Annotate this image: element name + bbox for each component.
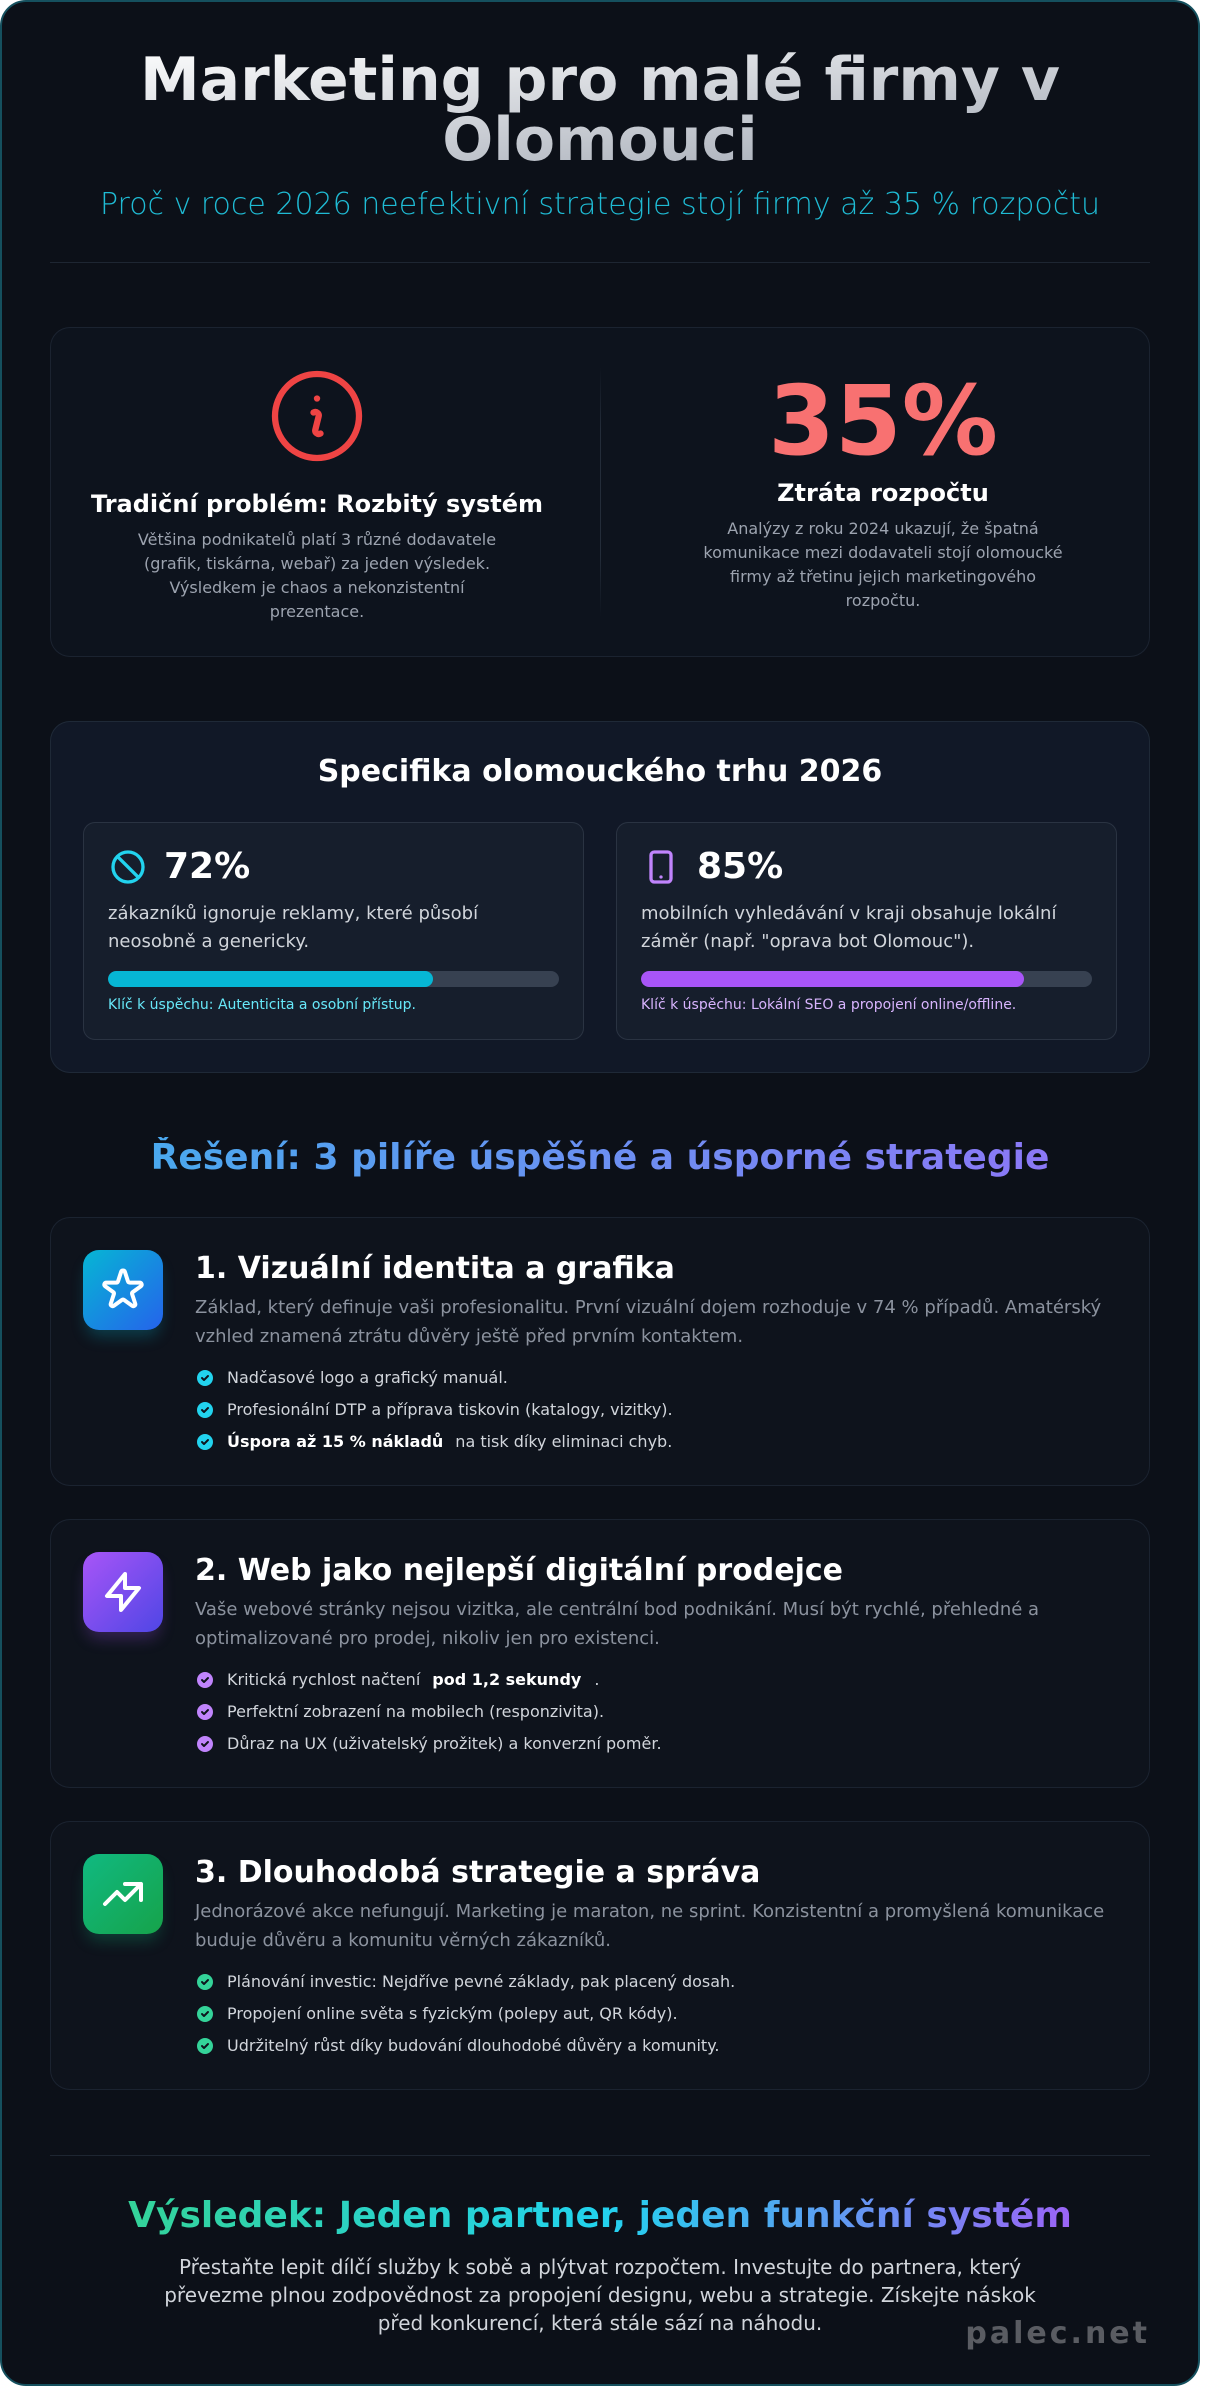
progress bar: 85 percent	[641, 971, 1092, 987]
list item: Profesionální DTP a příprava tiskovin (katalogy, vizitky).	[227, 1400, 673, 1419]
watermark: palec.net: palec.net	[965, 2316, 1150, 2351]
text: conclusion: převezme plnou zodpovědnost za propojení designu, webu a strategie. Získejte náskok	[164, 2283, 1036, 2307]
text: traditional problem: prezentace.	[270, 602, 364, 621]
text: conclusion: před konkurencí, která stále sází na náhodu.	[378, 2311, 822, 2335]
text: pillar 3	[194, 1901, 1104, 1951]
text: traditional problem: Výsledkem je chaos a nekonzistentní	[169, 578, 465, 597]
text: pillar 1: vzhled znamená ztrátu důvěry ještě před prvním kontaktem.	[195, 1326, 743, 1347]
text: pillar 2: optimalizované pro prodej, nikoliv jen pro existenci.	[195, 1628, 660, 1649]
text: pillar 3: Jednorázové akce nefungují. Marketing je maraton, ne sprint. Konzistentní a promyšlená komunikace	[195, 1901, 1104, 1922]
title	[50, 50, 1150, 170]
text: ads ignored: neosobně a genericky.	[108, 931, 309, 952]
heading: market specifics: Specifika olomouckého trhu 2026	[318, 754, 882, 789]
icon: bolt	[83, 1552, 163, 1632]
list item: Důraz na UX (uživatelský prožitek) a konverzní poměr.	[227, 1734, 662, 1753]
list item: Úspora až 15 % nákladů na tisk díky eliminaci chyb.	[227, 1432, 672, 1451]
text: conclusion: Přestaňte lepit dílčí služby k sobě a plýtvat rozpočtem. Investujte do partnera, který	[179, 2255, 1021, 2279]
heading: result: Výsledek: Jeden partner, jeden funkční systém	[128, 2195, 1072, 2236]
note: key to success: Klíč k úspěchu: Autenticita a osobní přístup.	[108, 997, 416, 1013]
progress bar: 72 percent	[108, 971, 559, 987]
heading: pillar 2: 2. Web jako nejlepší digitální prodejce	[195, 1553, 843, 1588]
text: pillar 1: Základ, který definuje vaši profesionalitu. První vizuální dojem rozhoduje v 74 % případů. Amatérský	[195, 1297, 1101, 1318]
text: pillar 2	[195, 1599, 1039, 1649]
panel: pillar 2	[50, 1519, 1150, 1788]
heading: budget loss: Ztráta rozpočtu	[777, 479, 989, 507]
text: budget loss: firmy až třetinu jejich marketingového	[730, 567, 1036, 586]
panel: problem and budget loss	[50, 327, 1150, 657]
text: pillar 2: Vaše webové stránky nejsou vizitka, ale centrální bod podnikání. Musí být rychlé, přehledné a	[195, 1599, 1039, 1620]
icon: star	[83, 1250, 163, 1330]
text: budget loss: rozpočtu.	[846, 591, 920, 610]
stat: 85 percent: 85%	[697, 846, 783, 887]
icon: trending up	[83, 1854, 163, 1934]
text: budget loss	[703, 519, 1063, 610]
list item: Propojení online světa s fyzickým (polepy aut, QR kódy).	[227, 2004, 678, 2023]
heading: solution: Řešení: 3 pilíře úspěšné a úsporné strategie	[151, 1137, 1049, 1178]
heading: pillar 1: 1. Vizuální identita a grafika	[195, 1251, 675, 1286]
card: 85 percent	[616, 822, 1117, 1040]
panel: Olomouc market	[50, 721, 1150, 1073]
text: mobile searches	[641, 903, 1057, 952]
card: 72 percent	[83, 822, 584, 1040]
note: key to success: Klíč k úspěchu: Lokální SEO a propojení online/offline.	[641, 997, 1016, 1013]
list item: Kritická rychlost načtení pod 1,2 sekundy .	[227, 1670, 599, 1689]
icon: mobile phone	[649, 850, 673, 884]
list item: Plánování investic: Nejdříve pevné základy, pak placený dosah.	[227, 1972, 735, 1991]
icon: ban	[111, 850, 145, 884]
subtitle: Proč v roce 2026 neefektivní strategie stojí firmy až 35 % rozpočtu	[100, 187, 1100, 222]
heading: pillar 3: 3. Dlouhodobá strategie a správa	[195, 1855, 760, 1890]
title: Marketing pro malé firmy v	[140, 45, 1060, 115]
text: traditional problem: Většina podnikatelů platí 3 různé dodavatele	[138, 530, 496, 549]
list item: Perfektní zobrazení na mobilech (responzivita).	[227, 1702, 604, 1721]
title: Olomouci	[442, 105, 758, 175]
list item: Nadčasové logo a grafický manuál.	[227, 1368, 508, 1387]
icon: info circle	[272, 370, 362, 462]
stat: 35 percent: 35%	[768, 365, 998, 477]
text: mobile searches: záměr (např. "oprava bot Olomouc").	[641, 931, 974, 952]
stat: 72 percent: 72%	[164, 846, 250, 887]
panel: pillar 3	[50, 1821, 1150, 2090]
text: ads ignored: zákazníků ignoruje reklamy, které působí	[108, 903, 478, 924]
text: mobile searches: mobilních vyhledávání v kraji obsahuje lokální	[641, 903, 1056, 924]
text: traditional problem: (grafik, tiskárna, webař) za jeden výsledek.	[144, 554, 490, 573]
text: conclusion	[164, 2255, 1036, 2335]
text: pillar 1	[195, 1297, 1101, 1347]
text: traditional problem	[138, 530, 496, 621]
text: ads ignored	[108, 903, 478, 952]
panel: pillar 1	[50, 1217, 1150, 1486]
heading: traditional problem: Tradiční problém: Rozbitý systém	[91, 490, 543, 518]
text: budget loss: Analýzy z roku 2024 ukazují, že špatná	[727, 519, 1039, 538]
text: pillar 3: buduje důvěru a komunitu věrných zákazníků.	[195, 1930, 611, 1951]
list item: Udržitelný růst díky budování dlouhodobé důvěry a komunity.	[227, 2036, 719, 2055]
text: budget loss: komunikace mezi dodavateli stojí olomoucké	[703, 543, 1063, 562]
